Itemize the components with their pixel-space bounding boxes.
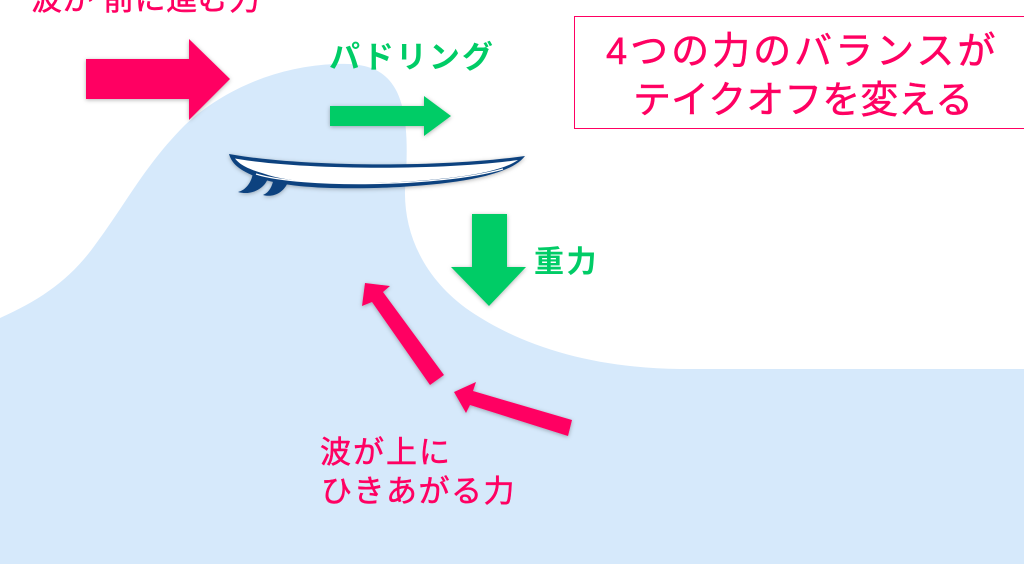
label: paddling: パドリング	[329, 40, 495, 75]
title box: 4つの力のバランスが	[606, 31, 998, 73]
title box	[574, 16, 1024, 128]
arrow: wave pull-up force	[454, 382, 572, 436]
label: wave lifting force	[320, 435, 516, 509]
arrow: upward force	[362, 283, 444, 385]
arrow: gravity	[451, 214, 526, 306]
arrow: wave forward force	[86, 39, 230, 120]
title box: テイクオフを変える	[633, 80, 973, 122]
arrow: paddling	[330, 96, 451, 136]
icon: surfboard	[229, 154, 525, 196]
label: gravity: 重力	[534, 246, 599, 279]
label: wave lifting force: 波が上に	[320, 435, 452, 470]
label: wave lifting force: ひきあがる力	[321, 474, 516, 509]
